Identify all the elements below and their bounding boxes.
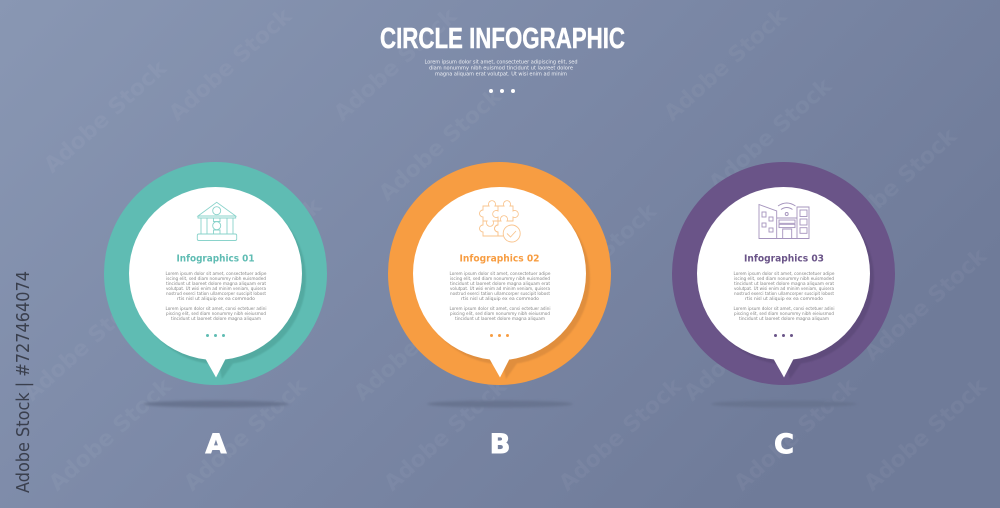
watermark pattern: Adobe Stock [530, 198, 663, 321]
body text B: Lorem ipsum dolor sit amet, consectetuer adipe [450, 271, 551, 277]
watermark pattern: Adobe Stock [830, 123, 963, 246]
dots C [774, 334, 793, 337]
watermark pattern: Adobe Stock [680, 283, 813, 406]
watermark pattern: Adobe Stock [350, 283, 483, 406]
body text A: volutpat. Ut wisi enim ad minim veniam, quisera [166, 286, 266, 292]
ground shadow A [143, 400, 289, 408]
panel: A [104, 162, 327, 460]
watermark pattern: Adobe Stock [860, 373, 993, 496]
watermark pattern: Adobe Stock [45, 373, 178, 496]
body text A: piscing elit, sed diam nonummy nibh eieiusmod [166, 311, 266, 317]
body text C: Lorem ipsum dolor sit amet, consi ectetuer adini [734, 306, 834, 312]
heading A: Infographics 01 [176, 254, 254, 264]
outer ring A [104, 162, 327, 385]
icon: puzzle with check [480, 201, 520, 242]
body text A: Lorem ipsum dolor sit amet, consi ectetuer adini [166, 306, 266, 312]
body text B: Lorem ipsum dolor sit amet, consi ectetuer adini [450, 306, 550, 312]
body text B: piscing elit, sed diam nonummy nibh eieiusmod [450, 311, 550, 317]
body text C: rtis nisl ut aliquip ex ea commodo [745, 296, 823, 302]
watermark pattern: Adobe Stock [165, 3, 298, 126]
white speech bubble B [413, 187, 586, 378]
body text C: piscing elit, sed diam nonummy nibh eieiusmod [734, 311, 834, 317]
body text B: tincidunt ut laoreet dolore magna aliquam [455, 316, 545, 322]
body text C: volutpat. Ut wisi enim ad minim veniam, quisera [734, 286, 834, 292]
ground shadow C [711, 400, 857, 408]
icon: bank [197, 202, 237, 240]
dots B [490, 334, 509, 337]
heading B: Infographics 02 [460, 254, 540, 264]
watermark pattern: Adobe Stock [380, 373, 513, 496]
inner shadow A [134, 192, 306, 379]
body text C: Lorem ipsum dolor sit amet, consectetuer adipe [734, 271, 835, 277]
letter C: C [774, 429, 794, 460]
white speech bubble A [129, 187, 302, 378]
body text C [734, 271, 835, 322]
watermark pattern: Adobe Stock [730, 373, 863, 496]
body text A: Lorem ipsum dolor sit amet, consectetuer adipe [166, 271, 267, 277]
watermark pattern: Adobe Stock [20, 283, 153, 406]
outer ring C [672, 162, 895, 385]
watermark pattern: Adobe Stock [705, 73, 838, 196]
letter A: A [206, 429, 227, 460]
body text A [166, 271, 267, 322]
body text B: volutpat. Ut wisi enim ad minim veniam, quisera [450, 286, 550, 292]
panel: B [388, 162, 611, 460]
body text C: iscing elit, sed diam nonummy nibh euismoded [734, 276, 834, 282]
heading C: Infographics 03 [744, 254, 824, 264]
ground shadow B [427, 400, 573, 408]
stock credit text: Adobe Stock | #727464074 [13, 271, 34, 493]
body text B [450, 271, 551, 322]
body text A: rtis nisl ut aliquip ex ea commodo [177, 296, 255, 302]
watermark pattern: Adobe Stock [555, 373, 688, 496]
inner shadow B [418, 192, 590, 379]
icon: smart buildings [759, 203, 809, 238]
title: CIRCLE INFOGRAPHIC [380, 23, 625, 55]
subtitle: diam nonummy nibh euismod tincidunt ut laoreet dolore [429, 66, 573, 72]
body text C: nostrud exerci tation ullamcorper suscipit lobost [734, 291, 834, 297]
body text A: tincidunt ut laoreet dolore magna aliquam [171, 316, 261, 322]
body text B: rtis nisl ut aliquip ex ea commodo [461, 296, 539, 302]
inner shadow C [702, 192, 874, 379]
subtitle [424, 60, 578, 78]
outer ring B [388, 162, 611, 385]
body text A: nostrud exerci tation ullamcorper suscipit lobost [166, 291, 266, 297]
subtitle: magna aliquam erat volutpat. Ut wisi enim ad minim [435, 72, 567, 78]
body text A: iscing elit, sed diam nonummy nibh euismoded [166, 276, 266, 282]
letter B: B [490, 429, 510, 460]
body text C: tincidunt ut laoreet dolore magna aliquam [739, 316, 829, 322]
panel: C [672, 162, 895, 460]
body text A: tincidunt ut laoreet dolore magna aliquam erat [166, 281, 266, 287]
watermark pattern: Adobe Stock [195, 193, 328, 316]
watermark pattern: Adobe Stock [660, 3, 793, 126]
watermark pattern: Adobe Stock [180, 373, 313, 496]
body text B: nostrud exerci tation ullamcorper suscipit lobost [450, 291, 550, 297]
watermark pattern: Adobe Stock [375, 83, 508, 206]
body text C: tincidunt ut laoreet dolore magna aliquam erat [734, 281, 834, 287]
subtitle: Lorem ipsum dolor sit amet, consectetuer adipiscing elit, sed [424, 60, 578, 66]
white speech bubble C [697, 187, 870, 378]
watermark pattern: Adobe Stock [860, 243, 993, 366]
dots A [206, 334, 225, 337]
watermark pattern: Adobe Stock [330, 3, 463, 126]
title dots [489, 89, 515, 93]
body text B: tincidunt ut laoreet dolore magna aliquam erat [450, 281, 550, 287]
body text B: iscing elit, sed diam nonummy nibh euismoded [450, 276, 550, 282]
watermark pattern: Adobe Stock [40, 55, 173, 178]
